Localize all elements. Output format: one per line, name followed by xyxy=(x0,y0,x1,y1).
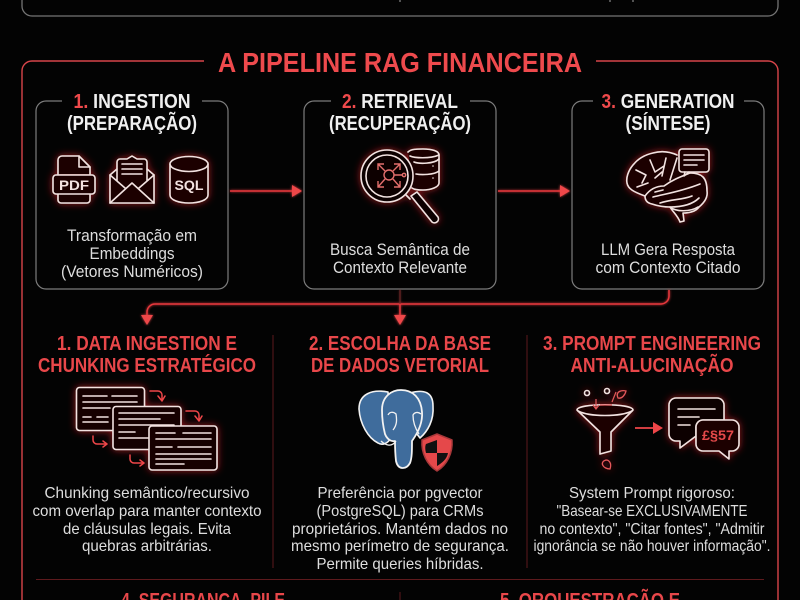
icon: funnel xyxy=(577,388,633,469)
text: step 1 description xyxy=(61,227,203,281)
text: section 3 description: System Prompt rigoroso: xyxy=(569,485,735,502)
text: section 1 description: Chunking semântico/recursivo xyxy=(44,485,250,502)
heading: section 2: DE DADOS VETORIAL xyxy=(311,355,489,377)
panel: data ingestion and chunking xyxy=(32,333,262,555)
icon: pdf document xyxy=(53,156,95,203)
text: section 1 description: de cláusulas legais. Evita xyxy=(63,521,231,538)
panel: step 3 generation xyxy=(572,91,764,289)
panel: vector database xyxy=(291,333,509,573)
icons: chunk flow arrows xyxy=(93,391,202,466)
text: section 1 description: quebras arbitrárias. xyxy=(82,538,212,555)
text: step 2 description: Busca Semântica de xyxy=(330,241,470,259)
arrow: connector to lower sections xyxy=(141,290,669,325)
icon: brain with speech bubble xyxy=(627,149,709,222)
panel: prompt engineering xyxy=(534,333,770,555)
text: section 2 description xyxy=(291,485,509,573)
text: step 3 description xyxy=(596,241,740,277)
heading: step 3: (SÍNTESE) xyxy=(626,112,710,135)
heading: section 2: 2. ESCOLHA DA BASE xyxy=(309,333,491,355)
heading: step 3: 3. GENERATION xyxy=(602,91,734,113)
text: step 3 description: LLM Gera Resposta xyxy=(601,241,736,259)
heading: section 1: CHUNKING ESTRATÉGICO xyxy=(38,354,256,377)
text: step 1 description: (Vetores Numéricos) xyxy=(61,263,203,281)
text: section 3 description xyxy=(534,485,770,555)
icon: search over database xyxy=(361,149,439,223)
text: step 3 description: com Contexto Citado xyxy=(596,259,740,277)
icon: security shield xyxy=(422,434,452,471)
icon: overlapping document chunks xyxy=(76,388,217,470)
text: step 2 description xyxy=(330,241,470,277)
heading: section 2 xyxy=(309,333,491,377)
arrow: step 2 to step 3 xyxy=(498,185,570,197)
arrow: step 1 to step 2 xyxy=(230,185,302,197)
heading: step 2: 2. RETRIEVAL xyxy=(342,91,458,113)
icon: email envelope xyxy=(110,156,154,203)
heading: step 1 xyxy=(67,91,197,135)
heading: section 3 xyxy=(543,333,761,377)
icon: postgresql elephant xyxy=(359,390,433,468)
arrow: funnel to response xyxy=(635,422,663,434)
dividers xyxy=(36,335,764,600)
panel: step 2 retrieval xyxy=(304,91,496,289)
title: A PIPELINE RAG FINANCEIRA xyxy=(218,47,582,78)
text: section 2 description: Permite queries híbridas. xyxy=(316,556,484,573)
text: section 3 description: ignorância se não houver informação". xyxy=(534,538,770,555)
text: section 3 description: "Basear-se EXCLUSIVAMENTE xyxy=(556,503,748,520)
icon: sql database xyxy=(170,156,208,203)
heading: step 2 xyxy=(329,91,471,135)
panel: step 1 ingestion xyxy=(36,91,228,289)
heading: section 3: ANTI-ALUCINAÇÃO xyxy=(570,354,734,377)
text: step 2 description: Contexto Relevante xyxy=(333,259,467,277)
text: section 2 description: Preferência por pgvector xyxy=(318,485,483,502)
icon: speech bubbles: £§57 xyxy=(702,427,734,443)
text: section 2 description: proprietários. Mantém dados no xyxy=(292,521,508,538)
heading: step 2: (RECUPERAÇÃO) xyxy=(329,112,471,135)
icon: speech bubbles xyxy=(669,398,739,459)
heading: section 1: 1. DATA INGESTION E xyxy=(57,333,237,355)
text: section 2 description: (PostgreSQL) para CRMs xyxy=(316,503,484,520)
heading: step 1: 1. INGESTION xyxy=(74,91,190,113)
text: section 1 description: com overlap para manter contexto xyxy=(32,503,262,520)
heading: step 1: (PREPARAÇÃO) xyxy=(67,112,197,135)
text: step 1 description: Transformação em xyxy=(67,227,197,245)
text: section 2 description: mesmo perímetro de segurança. xyxy=(291,538,509,555)
heading: step 3 xyxy=(602,91,734,135)
icon: sql database: SQL xyxy=(174,177,204,193)
top panel (cropped) xyxy=(22,0,778,16)
text: step 1 description: Embeddings xyxy=(90,245,174,263)
heading: section 1 xyxy=(38,333,256,377)
text: section 1 description xyxy=(32,485,262,555)
text: section 3 description: no contexto", "Citar fontes", "Admitir xyxy=(540,521,765,538)
heading: section 3: 3. PROMPT ENGINEERING xyxy=(543,333,761,355)
icon: pdf document: PDF xyxy=(59,177,89,193)
